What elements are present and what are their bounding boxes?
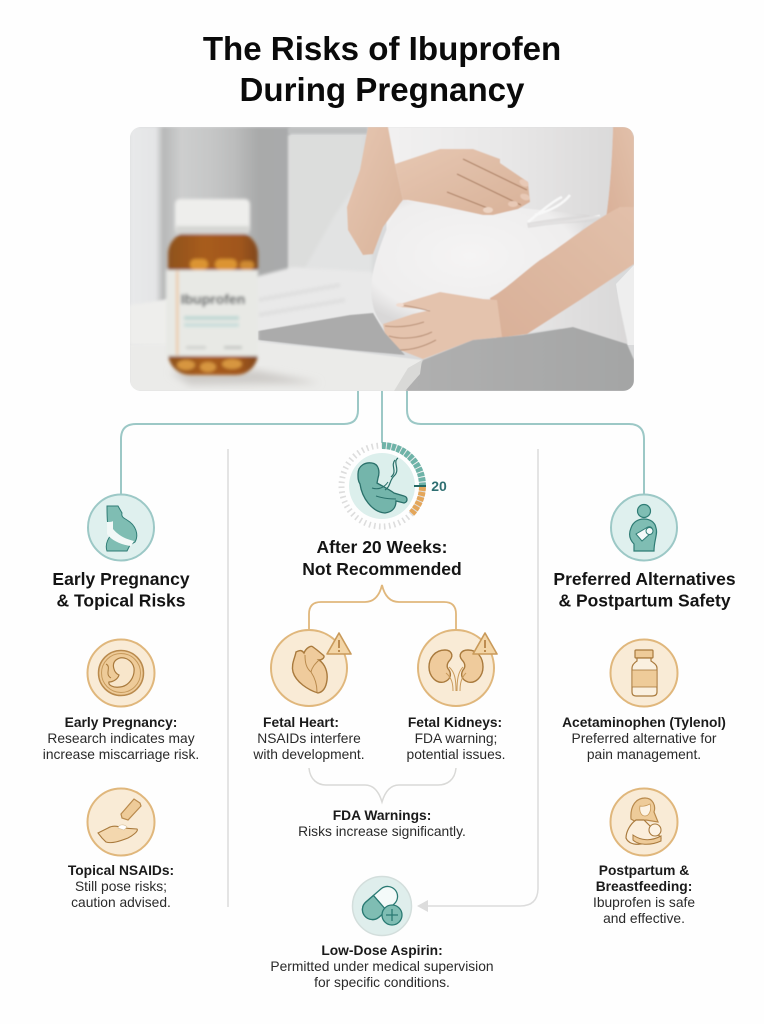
text: acetaminophen: pain management. — [587, 747, 701, 762]
icon: fetal heart — [271, 630, 351, 706]
text: FDA warnings: FDA Warnings: — [333, 808, 431, 823]
text: acetaminophen: Preferred alternative for — [572, 731, 717, 746]
text: fetal heart: Fetal Heart: — [263, 715, 339, 730]
text: fetal heart — [252, 715, 365, 762]
text: topical NSAIDs: Still pose risks; — [75, 879, 167, 894]
photo: woman — [258, 127, 634, 391]
center heading: After 20 Weeks: — [316, 537, 448, 557]
text: fetal heart: NSAIDs interfere — [257, 731, 361, 746]
icon: fetal kidneys — [418, 630, 497, 706]
text: low-dose aspirin: Permitted under medical supervision — [270, 959, 494, 974]
text: postpartum and breastfeeding: Postpartum & — [599, 863, 689, 878]
text: postpartum and breastfeeding — [593, 863, 695, 926]
left column heading icon: pregnant silhouette — [88, 494, 154, 560]
icon: topical tube and hand — [88, 788, 154, 856]
text: fetal kidneys: FDA warning; — [415, 731, 497, 746]
text: topical NSAIDs: caution advised. — [71, 895, 171, 910]
text: postpartum and breastfeeding: and effective. — [603, 911, 685, 926]
text: fetal kidneys: Fetal Kidneys: — [408, 715, 502, 730]
icon: medicine bottle — [610, 640, 678, 706]
text: postpartum and breastfeeding: Breastfeeding: — [596, 879, 692, 894]
left column heading: & Topical Risks — [56, 590, 186, 610]
title: During Pregnancy — [240, 72, 525, 109]
text: low-dose aspirin: for specific conditions. — [314, 975, 450, 990]
photo: table — [130, 342, 422, 391]
arrow: right divider to low-dose aspirin — [417, 449, 538, 912]
right column heading: & Postpartum Safety — [558, 590, 731, 610]
center heading: Not Recommended — [302, 559, 462, 579]
photo: pregnant woman and blurred pill bottle — [130, 127, 634, 391]
text: acetaminophen — [562, 715, 726, 762]
text: early pregnancy: Early Pregnancy: — [65, 715, 177, 730]
left column heading: Early Pregnancy — [52, 569, 190, 589]
text: fetal kidneys: potential issues. — [407, 747, 505, 762]
text: early pregnancy: Research indicates may — [47, 731, 195, 746]
photo: pill bottle: Ibuprofen — [181, 291, 245, 307]
text: acetaminophen: Acetaminophen (Tylenol) — [562, 715, 726, 730]
photo: pill bottle — [166, 199, 258, 375]
gauge: 20 weeks with fetus — [342, 446, 447, 526]
icon: warning triangle — [473, 633, 497, 654]
icon: embryo in tan circle — [88, 640, 154, 706]
text: early pregnancy — [43, 715, 199, 762]
text: fetal kidneys — [407, 715, 505, 762]
text: low-dose aspirin: Low-Dose Aspirin: — [321, 943, 443, 958]
icon: fetus — [358, 458, 407, 513]
text: early pregnancy: increase miscarriage risk. — [43, 747, 199, 762]
text: postpartum and breastfeeding: Ibuprofen is safe — [593, 895, 695, 910]
icon: capsule and plus — [352, 876, 412, 936]
right column heading icon: parent holding baby — [611, 494, 677, 560]
icon: breastfeeding mother — [610, 788, 678, 856]
text: FDA warnings — [298, 808, 466, 839]
bracket: to FDA warnings — [309, 768, 456, 802]
text: fetal heart: with development. — [252, 747, 365, 762]
title: The Risks of Ibuprofen — [203, 31, 561, 68]
bracket: to heart and kidneys — [309, 585, 456, 630]
left column heading — [52, 569, 190, 610]
right column heading — [553, 569, 736, 610]
center heading — [302, 537, 462, 579]
icon: warning triangle — [327, 633, 351, 654]
text: topical NSAIDs: Topical NSAIDs: — [68, 863, 174, 878]
text: low-dose aspirin — [270, 943, 494, 990]
title — [203, 31, 561, 109]
connector lines from photo — [121, 391, 644, 494]
text: topical NSAIDs — [68, 863, 174, 910]
text: FDA warnings: Risks increase significantly. — [298, 824, 466, 839]
right column heading: Preferred Alternatives — [553, 569, 736, 589]
column divider left — [227, 449, 229, 907]
gauge: 20 weeks with fetus: 20 — [431, 478, 447, 494]
